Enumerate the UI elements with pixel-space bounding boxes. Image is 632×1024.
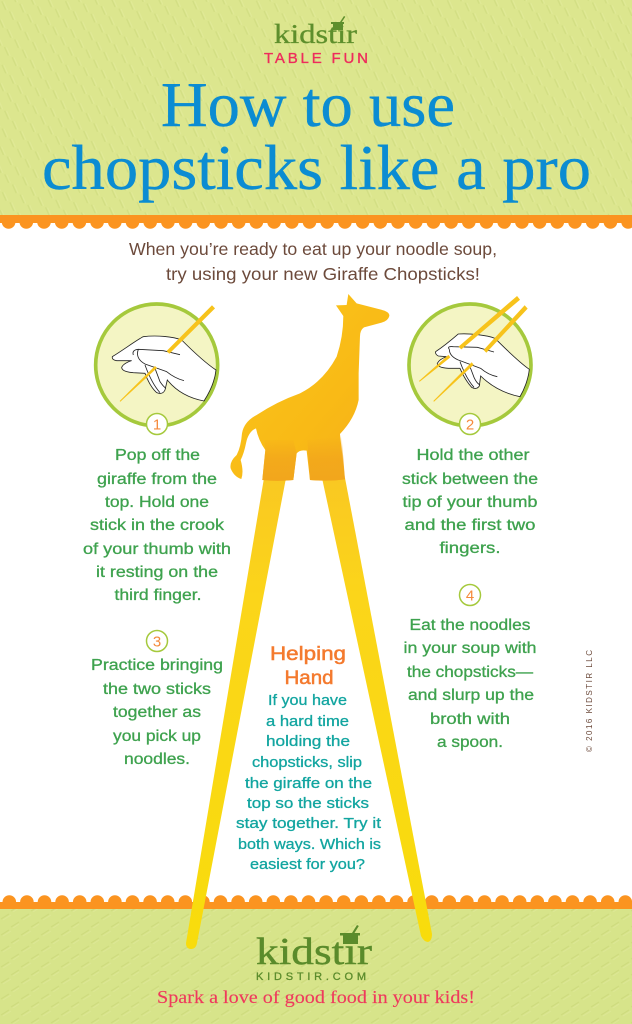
helping hand text: stay together. Try it xyxy=(236,815,382,832)
title: How to use xyxy=(161,69,455,140)
intro text xyxy=(129,239,497,284)
step 2 text: Hold the other xyxy=(416,447,530,464)
step 4 text: the chopsticks— xyxy=(407,664,534,681)
step 4 text: Eat the noodles xyxy=(410,617,531,634)
chopstick: right xyxy=(322,478,432,942)
icon: chopsticks xyxy=(419,297,527,401)
icon: hand xyxy=(436,334,529,397)
footer tagline: Spark a love of good food in your kids! xyxy=(157,987,475,1007)
step 3 text xyxy=(91,657,223,768)
bottom green footer background xyxy=(0,908,632,1024)
number badge 2 xyxy=(460,414,480,434)
step 2 text: and the first two xyxy=(404,517,536,534)
top logo: kidstir: kidstir xyxy=(274,19,357,49)
helping hand text: top so the sticks xyxy=(247,795,369,812)
intro text: When you’re ready to eat up your noodle soup, xyxy=(129,239,497,259)
number badge 1 xyxy=(146,414,168,434)
step 4 text: and slurp up the xyxy=(408,687,534,704)
footer url: KIDSTIR.COM xyxy=(256,971,366,983)
step 4 text: a spoon. xyxy=(437,734,503,751)
step 3 text: Practice bringing xyxy=(91,657,223,674)
step 2 text xyxy=(402,447,538,557)
icon: hand xyxy=(112,336,216,401)
step 1 text: giraffe from the xyxy=(97,471,217,488)
intro text: try using your new Giraffe Chopsticks! xyxy=(166,264,480,284)
helping hand text: easiest for you? xyxy=(250,856,365,873)
number badge 2: 2 xyxy=(466,416,474,434)
step 1 text: top. Hold one xyxy=(105,494,209,511)
title xyxy=(42,69,591,203)
chopstick: left xyxy=(186,478,286,949)
helping hand text: chopsticks, slip xyxy=(252,754,362,771)
step 3 text: the two sticks xyxy=(103,681,211,698)
icon: chopstick xyxy=(120,306,214,401)
step 1 text: stick in the crook xyxy=(90,517,224,534)
step 1 text: third finger. xyxy=(114,587,202,604)
number badge 3: 3 xyxy=(153,634,161,650)
icon: circle xyxy=(96,304,218,426)
helping hand text: the giraffe on the xyxy=(245,775,372,792)
step 2 text: stick between the xyxy=(402,471,538,488)
step 4 text xyxy=(404,617,536,751)
step 2 text: tip of your thumb xyxy=(402,494,538,511)
helping hand text: If you have xyxy=(268,692,347,709)
number badge 4: 4 xyxy=(466,588,474,604)
number badge 1: 1 xyxy=(153,416,161,434)
helping hand text: a hard time xyxy=(266,713,349,730)
footer logo: kidstir: kidstir xyxy=(256,931,372,973)
step 3 text: you pick up xyxy=(113,728,201,745)
top orange scalloped border xyxy=(0,215,632,229)
step 1 text: of your thumb with xyxy=(83,541,231,558)
helping hand heading: Helping xyxy=(270,644,346,665)
helping hand heading: Hand xyxy=(284,668,334,689)
giraffe xyxy=(230,294,389,481)
helping hand text xyxy=(236,692,382,873)
icon: circle xyxy=(409,304,531,426)
step 1 text: Pop off the xyxy=(115,447,200,464)
step 4 text: in your soup with xyxy=(404,640,536,657)
step 1 text xyxy=(83,447,231,604)
title: chopsticks like a pro xyxy=(42,132,591,203)
step 2 illustration xyxy=(409,297,531,426)
helping hand text: both ways. Which is xyxy=(238,836,381,853)
step 3 text: together as xyxy=(113,704,201,721)
bottom orange scalloped border xyxy=(0,895,632,909)
step 1 illustration xyxy=(96,304,218,426)
step 2 text: fingers. xyxy=(440,540,500,557)
step 3 text: noodles. xyxy=(124,751,190,768)
step 1 text: it resting on the xyxy=(96,564,218,581)
icon: pot with spoon xyxy=(340,925,360,944)
number badge 4 xyxy=(460,584,480,606)
helping hand heading xyxy=(270,644,346,689)
helping hand text: holding the xyxy=(266,733,350,750)
label: table fun: TABLE FUN xyxy=(264,50,368,67)
step 4 text: broth with xyxy=(430,711,510,728)
icon: pot with spoon xyxy=(331,16,345,30)
top green header background xyxy=(0,0,632,216)
copyright: © 2016 KIDSTIR LLC xyxy=(585,650,594,752)
number badge 3 xyxy=(146,630,168,652)
